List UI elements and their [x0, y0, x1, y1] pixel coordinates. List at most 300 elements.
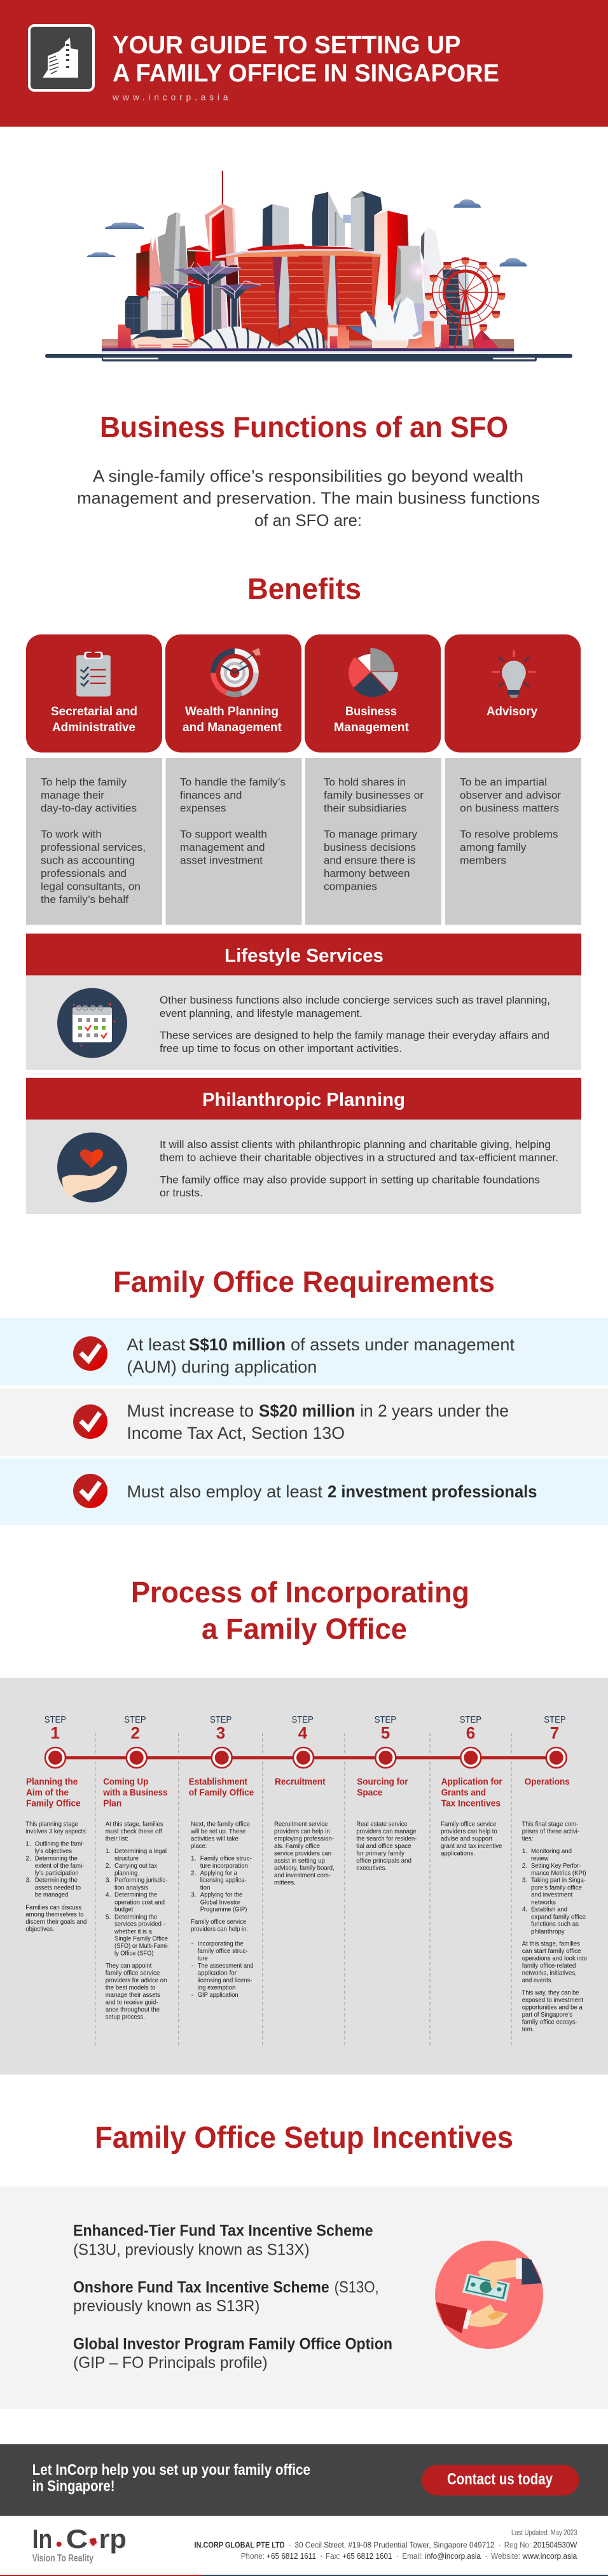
- header banner: [0, 0, 608, 127]
- step 4: advisory, family board,: [274, 1865, 335, 1872]
- step 2: whether it is a: [114, 1928, 152, 1935]
- heading: Business Functions of an SFO: Business Functions of an SFO: [100, 410, 508, 444]
- requirement text: S$10 million: [189, 1335, 286, 1354]
- text panel: Wealth Planning and Management: finances and: [180, 789, 242, 801]
- text panel: Advisory: [445, 758, 581, 925]
- intro paragraph: [77, 466, 540, 529]
- step 7: operations and look into: [522, 1956, 587, 1963]
- step 1: ly’s participation: [35, 1870, 79, 1877]
- step 4: STEP: [291, 1714, 314, 1725]
- text panel: Wealth Planning and Management: expenses: [180, 802, 226, 814]
- text block: them to achieve their charitable objectives in a structured and tax-efficient manner.: [160, 1152, 558, 1164]
- incentive list: (S13O,: [335, 2278, 379, 2296]
- step 5: executives.: [356, 1865, 387, 1872]
- text block: Other business functions also include concierge services such as travel planning,: [160, 994, 550, 1006]
- step 1: [25, 1714, 87, 1933]
- footer contact details: 30 Cecil Street, #19-08 Prudential Tower, Singapore 049712: [294, 2540, 494, 2550]
- step 3: licensing applica-: [200, 1877, 247, 1884]
- card title: and Management: [183, 720, 282, 734]
- step 3: Family office service: [191, 1919, 247, 1926]
- CTA text: Let InCorp help you set up your family office: [32, 2461, 310, 2479]
- text block: These services are designed to help the family manage their everyday affairs and: [160, 1030, 549, 1042]
- step 4: and investment com-: [274, 1872, 331, 1879]
- step 7: exposed to investment: [522, 1997, 583, 2004]
- step 2: 2.: [106, 1863, 111, 1870]
- step 2: operation cost and: [114, 1899, 165, 1906]
- step 5: Real estate service: [356, 1821, 408, 1828]
- requirement text: S$20 million: [259, 1401, 355, 1420]
- step 3: ture: [198, 1956, 208, 1963]
- step 4: employing profession-: [274, 1836, 334, 1843]
- step 3: -: [191, 1963, 193, 1970]
- incentive list: previously known as S13R): [73, 2297, 259, 2315]
- step 1: assets needed to: [35, 1884, 81, 1891]
- footer contact details: Last Updated: May 2023: [511, 2528, 577, 2537]
- step 2: STEP: [124, 1714, 146, 1725]
- intro paragraph: of an SFO are:: [254, 510, 362, 529]
- footer contact details: ·: [289, 2540, 291, 2550]
- step 7: can start family office: [522, 1948, 581, 1955]
- step 3: family office struc-: [198, 1948, 248, 1955]
- step 5: Space: [357, 1788, 382, 1798]
- step 3: Next, the family office: [191, 1821, 250, 1828]
- text panel: Wealth Planning and Management: asset investment: [180, 854, 263, 867]
- step 3: 3.: [191, 1892, 197, 1899]
- text block: or trusts.: [160, 1187, 203, 1199]
- step 2: Performing jurisdic-: [114, 1877, 167, 1884]
- text panel: Business Management: To manage primary: [324, 829, 417, 840]
- panel: process steps: [0, 1678, 608, 2075]
- incentive list: Onshore Fund Tax Incentive Scheme: [73, 2278, 329, 2296]
- step 4: providers can help in: [274, 1828, 330, 1835]
- step 2: Determining a legal: [114, 1848, 167, 1855]
- step 3: Programme (GIP): [200, 1907, 247, 1914]
- step 7: prises of these activi-: [522, 1828, 579, 1835]
- title: A FAMILY OFFICE IN SINGAPORE: [113, 60, 499, 87]
- step 2: Determining the: [114, 1914, 158, 1921]
- requirement text: At least: [127, 1335, 186, 1354]
- icon: pie chart: [349, 648, 398, 697]
- text panel: Wealth Planning and Management: To handle the family’s: [180, 776, 286, 788]
- text panel: Wealth Planning and Management: management and: [180, 841, 265, 853]
- footer contact details: ·: [320, 2551, 322, 2561]
- call to action band: [0, 2444, 608, 2516]
- text panel: Secretarial and Administrative: the family’s behalf: [41, 893, 128, 906]
- step 5: office principals and: [356, 1858, 411, 1865]
- footer contact details: Email: info@incorp.asia: [402, 2551, 481, 2561]
- step 2: with a Business: [102, 1788, 168, 1798]
- step 6: grant and tax incentive: [441, 1843, 502, 1850]
- step 6: Tax Incentives: [441, 1798, 501, 1809]
- step 1: Planning the: [26, 1777, 78, 1788]
- step 7: pore’s family office: [531, 1884, 582, 1891]
- step 3: providers can help in:: [191, 1926, 248, 1933]
- step 2: ance throughout the: [106, 2006, 160, 2013]
- text panel: Wealth Planning and Management: To support wealth: [180, 829, 267, 840]
- step 6: 6: [466, 1723, 475, 1742]
- step 2: providers for advice on: [106, 1977, 167, 1984]
- panel: Business Management: [305, 634, 441, 752]
- step 3: Incorporating the: [198, 1941, 244, 1948]
- CTA text: [32, 2461, 310, 2495]
- step 2: and to receive guid-: [106, 1999, 158, 2006]
- step 4: mittees.: [274, 1880, 296, 1887]
- step 1: 3.: [25, 1877, 31, 1884]
- step 5: Sourcing for: [357, 1777, 408, 1788]
- step 4: service providers can: [274, 1851, 331, 1858]
- step 2: must check these off: [106, 1828, 162, 1835]
- panel: Wealth Planning and Management: [165, 634, 301, 752]
- requirement text: (AUM) during application: [127, 1357, 317, 1376]
- step 7: and events.: [522, 1977, 553, 1984]
- step 3: -: [191, 1992, 193, 1999]
- heading: Lifestyle Services: [225, 946, 383, 967]
- step 5: 5: [381, 1723, 390, 1742]
- step 4: Recruitment: [275, 1777, 326, 1788]
- requirement text: in 2 years under the: [360, 1401, 509, 1420]
- footer contact details: Phone: +65 6812 1611: [241, 2551, 316, 2561]
- requirement text: Must increase to: [127, 1401, 254, 1420]
- requirement 2: [0, 1389, 608, 1456]
- website url: www.incorp.asia: [112, 92, 228, 102]
- step 2: Carrying out tax: [114, 1863, 158, 1870]
- icon: heart in hand: [57, 1133, 127, 1203]
- step 2: Coming Up: [103, 1777, 148, 1788]
- text panel: Secretarial and Administrative: legal consultants, on: [41, 881, 141, 893]
- step 7: 4.: [522, 1907, 527, 1914]
- card title: [51, 704, 137, 734]
- step 7: ties:: [522, 1836, 533, 1843]
- step 1: STEP: [45, 1714, 66, 1725]
- step 2: budget: [114, 1907, 133, 1914]
- text panel: Business Management: To hold shares in: [324, 776, 406, 788]
- step 7: Taking part in Singa-: [531, 1877, 586, 1884]
- step 1: extent of the fami-: [35, 1863, 84, 1870]
- step 7: family office-related: [522, 1963, 576, 1970]
- panel: Lifestyle Services: [26, 934, 581, 1070]
- text panel: Business Management: harmony between: [324, 867, 410, 879]
- step 7: family office ecosys-: [522, 2019, 577, 2026]
- step 1: be managed: [35, 1892, 69, 1899]
- step 3: Applying for the: [200, 1892, 243, 1899]
- text block: [160, 994, 550, 1054]
- panel: Secretarial and Administrative: [26, 634, 162, 752]
- step 1: 1: [50, 1723, 60, 1742]
- requirement text: [127, 1335, 515, 1376]
- footer contact details: ·: [485, 2551, 488, 2561]
- logo: InCorp: rp: [99, 2524, 127, 2554]
- card title: Secretarial and: [51, 704, 137, 718]
- step 7: functions such as: [531, 1921, 579, 1928]
- step 3: licensing and licens-: [198, 1977, 252, 1984]
- text panel: Wealth Planning and Management: [165, 758, 301, 925]
- requirement 1: [0, 1318, 608, 1385]
- footer contact details: ·: [396, 2551, 399, 2561]
- step 6: Application for: [441, 1777, 502, 1788]
- step 1: Families can discuss: [25, 1904, 81, 1911]
- title: YOUR GUIDE TO SETTING UP: [113, 31, 460, 59]
- panel: Advisory: [445, 634, 581, 752]
- icon: clipboard: [76, 648, 111, 696]
- step 7: At this stage, families: [522, 1941, 580, 1948]
- heading: Philanthropic Planning: [202, 1089, 405, 1110]
- text panel: Business Management: their subsidiaries: [324, 802, 406, 814]
- step 4: 4: [298, 1723, 308, 1742]
- step 3: of Family Office: [189, 1788, 254, 1798]
- text panel: Secretarial and Administrative: professionals and: [41, 867, 127, 879]
- step 2: manage their assets: [106, 1992, 160, 1999]
- step 4: als. Family office: [274, 1843, 320, 1850]
- text panel: Business Management: and ensure there is: [324, 854, 415, 867]
- text block: event planning, and lifestyle management.: [160, 1007, 363, 1019]
- step 7: mance Metrics (KPI): [531, 1870, 586, 1877]
- step 4: assist in setting up: [274, 1858, 325, 1865]
- step 2: Plan: [103, 1798, 121, 1809]
- icon: light bulb: [492, 650, 535, 698]
- step 7: Monitoring and: [531, 1848, 572, 1855]
- step 7: 7: [550, 1723, 559, 1742]
- step 1: objectives.: [25, 1926, 55, 1933]
- icon: target: [211, 648, 261, 697]
- intro paragraph: management and preservation. The main business functions: [77, 489, 540, 508]
- text block: free up time to focus on other important activities.: [160, 1042, 402, 1054]
- timeline: [45, 1747, 567, 1768]
- step 3: [189, 1714, 254, 1999]
- step 2: 5.: [106, 1914, 111, 1921]
- step 1: among themselves to: [25, 1912, 84, 1919]
- step 3: tion: [200, 1884, 211, 1891]
- step 2: (SFO) or Multi-Fami-: [114, 1943, 169, 1950]
- step 2: 4.: [106, 1892, 111, 1899]
- text block: The family office may also provide support in setting up charitable foundations: [160, 1173, 540, 1186]
- heading: Process of Incorporating a Family Office: [131, 1576, 469, 1646]
- step 2: services provided -: [114, 1921, 165, 1928]
- step 1: Determining the: [35, 1877, 78, 1884]
- panel: incentives: [0, 2187, 608, 2409]
- footer contact details: IN.CORP GLOBAL PTE LTD: [195, 2540, 285, 2550]
- incentive list: Enhanced-Tier Fund Tax Incentive Scheme: [73, 2222, 373, 2240]
- card title: Administrative: [52, 720, 135, 734]
- icon: check mark: [73, 1474, 107, 1508]
- text panel: Advisory: among family: [460, 841, 527, 853]
- step 2: ly Office (SFO): [114, 1950, 153, 1957]
- step 2: At this stage, families: [106, 1821, 163, 1828]
- heading: Family Office Requirements: Family Office Requirements: [113, 1265, 495, 1298]
- text panel: Business Management: business decisions: [324, 841, 416, 853]
- step 7: [522, 1714, 587, 2033]
- icon: calendar: [57, 988, 127, 1058]
- text panel: Business Management: family businesses or: [324, 789, 424, 801]
- step 2: They can appoint: [106, 1963, 152, 1970]
- step 5: tial and office space: [356, 1843, 411, 1850]
- CTA text: in Singapore!: [32, 2478, 114, 2495]
- step 4: [274, 1714, 335, 1887]
- step 6: advise and support: [441, 1836, 492, 1843]
- step 5: the search for residen-: [356, 1836, 417, 1843]
- step 6: [441, 1714, 502, 1858]
- step 7: opportunities and be a: [522, 2004, 583, 2011]
- heading: Benefits: Benefits: [247, 572, 361, 605]
- step 3: will be set up. These: [190, 1828, 246, 1835]
- icon: check mark: [73, 1336, 107, 1371]
- text block: It will also assist clients with philanthropic planning and charitable giving, helping: [160, 1138, 551, 1151]
- incentive list: (S13U, previously known as S13X): [73, 2241, 310, 2258]
- step 3: application for: [198, 1970, 237, 1977]
- footer contact details: Reg No: 201504530W: [504, 2540, 577, 2550]
- logo: InCorp: [32, 2524, 127, 2564]
- text panel: Advisory: on business matters: [460, 802, 559, 814]
- text panel: Secretarial and Administrative: professional services,: [41, 841, 146, 853]
- step 5: STEP: [375, 1714, 396, 1725]
- step 2: the best models to: [106, 1984, 156, 1991]
- step 2: 1.: [106, 1848, 111, 1855]
- card title: Business: [345, 704, 397, 718]
- step 3: activities will take: [191, 1836, 238, 1843]
- panel: Philanthropic Planning: [26, 1078, 581, 1214]
- step 1: ly’s objectives: [35, 1848, 72, 1855]
- step 3: Applying for a: [200, 1870, 237, 1877]
- title: [113, 31, 499, 87]
- step 1: involves 3 key aspects:: [25, 1828, 87, 1835]
- requirement text: Must also employ at least: [127, 1482, 322, 1501]
- step 7: and investment: [531, 1892, 572, 1899]
- step 2: setup process.: [106, 2013, 145, 2020]
- step 7: part of Singapore’s: [522, 2012, 572, 2019]
- step 2: [102, 1714, 169, 2020]
- step 7: 2.: [522, 1863, 527, 1870]
- illustration: Singapore skyline: [45, 171, 572, 361]
- card title: Wealth Planning: [185, 704, 279, 718]
- step 3: 3: [216, 1723, 225, 1742]
- step 5: [356, 1714, 417, 1872]
- step 7: networks, initiatives,: [522, 1970, 577, 1977]
- text panel: Business Management: [305, 758, 441, 925]
- text panel: Secretarial and Administrative: day-to-day activities: [41, 802, 137, 814]
- step 1: Outlining the fami-: [35, 1840, 84, 1847]
- text panel: Secretarial and Administrative: [26, 758, 162, 925]
- logo: InCorp: Vision To Reality: [32, 2553, 93, 2564]
- step 3: -: [191, 1941, 193, 1948]
- requirement 3: [0, 1459, 608, 1525]
- step 3: Establishment: [189, 1777, 247, 1788]
- text panel: Advisory: observer and advisor: [460, 789, 561, 801]
- step 4: Recruitment service: [274, 1821, 328, 1828]
- step 6: STEP: [460, 1714, 481, 1725]
- step 7: networks: [531, 1899, 556, 1906]
- step 7: Operations: [525, 1777, 570, 1788]
- requirement text: [127, 1401, 509, 1443]
- step 5: for primary family: [356, 1851, 405, 1858]
- step 3: ture incorporation: [200, 1863, 248, 1870]
- step 2: 2: [130, 1723, 140, 1742]
- step 2: Single Family Office: [114, 1936, 168, 1943]
- step 7: 1.: [522, 1848, 527, 1855]
- step 2: planning: [114, 1870, 138, 1877]
- step 1: Family Office: [26, 1798, 81, 1809]
- button: contact us: Contact us today: [447, 2470, 553, 2488]
- requirement text: [127, 1482, 537, 1501]
- step 6: providers can help to: [441, 1828, 497, 1835]
- icon: building logo: [29, 25, 93, 90]
- step 7: Setting Key Perfor-: [531, 1863, 581, 1870]
- step 6: applications.: [441, 1851, 475, 1858]
- footer contact details: [195, 2528, 577, 2561]
- step 3: Global Investor: [200, 1899, 241, 1906]
- step 3: STEP: [210, 1714, 231, 1725]
- step 3: 2.: [191, 1870, 197, 1877]
- incentive list: [73, 2222, 392, 2372]
- step 3: GIP application: [198, 1992, 238, 1999]
- step 1: discern their goals and: [25, 1919, 87, 1926]
- heading: Process of Incorporating a Family Office: a Family Office: [202, 1613, 407, 1646]
- logo: InCorp: C: [66, 2524, 88, 2554]
- heading: Process of Incorporating a Family Office: Process of Incorporating: [131, 1576, 469, 1609]
- step 7: STEP: [544, 1714, 566, 1725]
- step 1: Determining the: [35, 1855, 78, 1862]
- step 1: 1.: [25, 1840, 31, 1847]
- step 2: their list:: [106, 1836, 128, 1843]
- step 3: Family office struc-: [200, 1855, 252, 1862]
- footer contact details: Website: www.incorp.asia: [491, 2551, 577, 2561]
- text block: [160, 1138, 558, 1199]
- logo: InCorp: In: [32, 2524, 52, 2554]
- step 7: This final stage com-: [522, 1821, 578, 1828]
- step 7: expand family office: [531, 1914, 586, 1921]
- incentive list: Global Investor Program Family Office Option: [73, 2335, 392, 2353]
- heading: Family Office Setup Incentives: Family Office Setup Incentives: [95, 2121, 513, 2155]
- text panel: Advisory: To resolve problems: [460, 829, 558, 840]
- step 1: 2.: [25, 1855, 31, 1862]
- step 7: review: [531, 1855, 549, 1862]
- step 2: 3.: [106, 1877, 111, 1884]
- incentive list: (GIP – FO Principals profile): [73, 2354, 268, 2372]
- intro paragraph: A single-family office’s responsibilities go beyond wealth: [93, 466, 523, 486]
- icon: check mark: [73, 1404, 107, 1439]
- step 6: Family office service: [441, 1821, 497, 1828]
- card title: [334, 704, 409, 734]
- requirement text: 2 investment professionals: [328, 1482, 537, 1501]
- text panel: Secretarial and Administrative: To help the family: [41, 776, 127, 788]
- card title: [183, 704, 282, 734]
- text panel: Secretarial and Administrative: manage their: [41, 789, 104, 801]
- text panel: Secretarial and Administrative: To work with: [41, 829, 102, 840]
- step 7: 3.: [522, 1877, 527, 1884]
- footer contact details: Fax: +65 6812 1601: [326, 2551, 392, 2561]
- step 3: place:: [191, 1843, 207, 1850]
- step 3: The assessment and: [198, 1963, 254, 1970]
- card title: Advisory: [487, 704, 537, 718]
- text panel: Advisory: To be an impartial: [460, 776, 547, 788]
- step 1: Aim of the: [26, 1788, 69, 1798]
- step 7: Establish and: [531, 1907, 567, 1914]
- step 3: 1.: [191, 1855, 197, 1862]
- step 6: Grants and: [441, 1788, 486, 1798]
- requirement text: Income Tax Act, Section 13O: [127, 1424, 345, 1443]
- step 3: ing exemption: [198, 1984, 236, 1991]
- card title: Management: [334, 720, 409, 734]
- text panel: Secretarial and Administrative: such as accounting: [41, 854, 135, 867]
- step 2: tion analysis: [114, 1884, 148, 1891]
- step 5: providers can manage: [356, 1828, 417, 1835]
- requirement text: of assets under management: [291, 1335, 515, 1354]
- text panel: Business Management: companies: [324, 881, 377, 893]
- step 1: This planning stage: [25, 1821, 78, 1828]
- step 7: tem.: [522, 2026, 534, 2033]
- footer contact details: ·: [499, 2540, 501, 2550]
- button: contact us: [422, 2465, 579, 2496]
- step 7: philanthropy: [531, 1928, 565, 1935]
- icon: hands exchanging money: [435, 2241, 543, 2349]
